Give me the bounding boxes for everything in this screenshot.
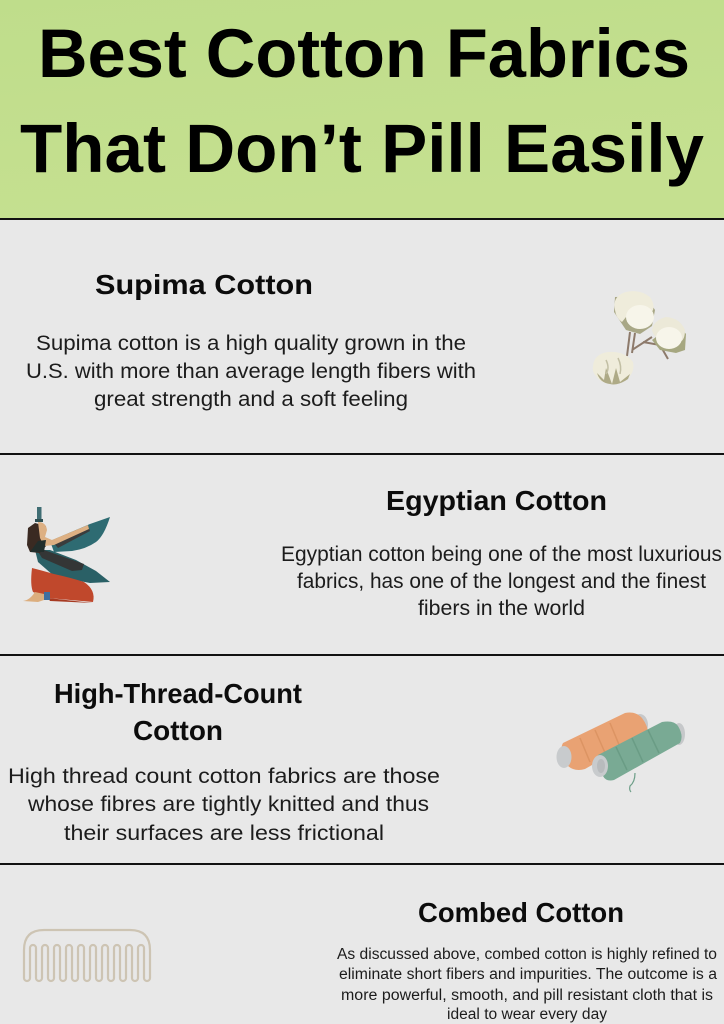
text block: High-thread-count description (8, 765, 440, 845)
heading: High-Thread-Count Cotton (54, 678, 302, 746)
text block: Supima description (26, 332, 476, 411)
title: Best Cotton Fabrics (38, 15, 690, 92)
text block: Egyptian description: fabrics, has one of the longest and the finest (297, 570, 706, 593)
icon: Egyptian goddess with wings (23, 507, 110, 603)
panel: Combed Cotton (24, 897, 717, 1023)
text block: Supima description: Supima cotton is a high quality grown in the (36, 332, 466, 355)
heading: High-Thread-Count Cotton: Cotton (133, 715, 223, 746)
text block: Combed description: eliminate short fibers and impurities. The outcome is a (339, 966, 717, 983)
text block: Supima description: great strength and a soft feeling (94, 388, 408, 411)
title: That Don’t Pill Easily (20, 110, 704, 187)
text block: Combed description: As discussed above, combed cotton is highly refined to (337, 946, 717, 963)
panel: Supima Cotton (26, 269, 686, 411)
heading: Combed Cotton: Combed Cotton (418, 897, 624, 928)
header banner (0, 0, 724, 218)
icon: cotton bolls (593, 291, 686, 384)
text block: Combed description: ideal to wear every day (447, 1006, 607, 1023)
text block: Egyptian description: fibers in the world (418, 597, 585, 620)
heading: Supima Cotton: Supima Cotton (95, 269, 313, 300)
heading: High-Thread-Count Cotton: High-Thread-Count (54, 678, 302, 709)
text block: High-thread-count description: their surfaces are less frictional (64, 822, 384, 845)
text block: Combed description: more powerful, smooth, and pill resistant cloth that is (341, 987, 713, 1004)
icon: thread spools (556, 713, 685, 792)
panel: High-Thread-Count Cotton (8, 678, 685, 845)
text block: Supima description: U.S. with more than average length fibers with (26, 360, 476, 383)
text block: Combed description (337, 946, 717, 1023)
title (20, 15, 704, 187)
text block: High-thread-count description: High thread count cotton fabrics are those (8, 765, 440, 788)
text block: Egyptian description: Egyptian cotton being one of the most luxurious (281, 543, 722, 566)
text block: High-thread-count description: whose fibres are tightly knitted and thus (27, 793, 429, 816)
text block: Egyptian description (281, 543, 722, 620)
icon: comb (24, 930, 150, 981)
heading: Egyptian Cotton: Egyptian Cotton (386, 485, 607, 516)
panel: Egyptian Cotton (23, 485, 722, 620)
